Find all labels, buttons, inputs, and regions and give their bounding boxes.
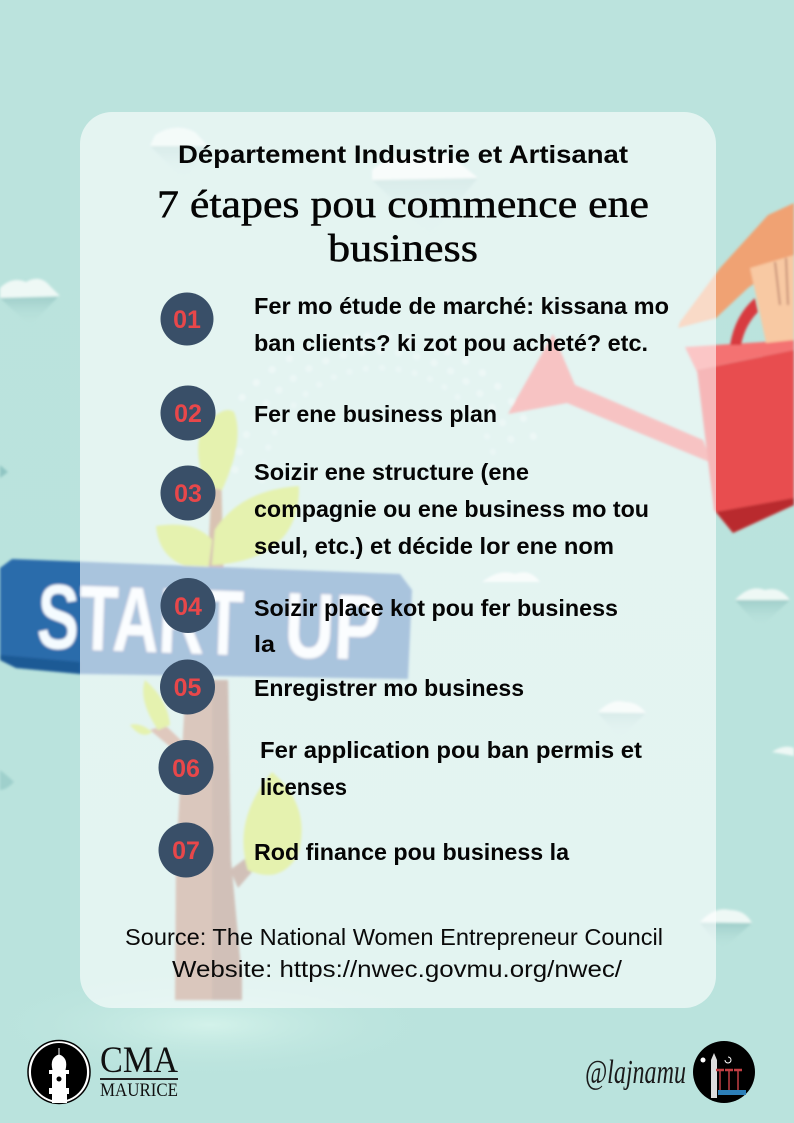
step 04: Soizir place kot pou fer business — [254, 595, 618, 621]
step 06: 06 — [172, 755, 200, 783]
hand — [678, 203, 794, 343]
step 03: Soizir ene structure (ene — [254, 459, 529, 485]
icon: minaret badge — [28, 1040, 90, 1104]
start up sign — [0, 559, 412, 680]
logo: CMA Maurice — [28, 1040, 178, 1104]
title: 7 étapes pou commence ene — [157, 183, 649, 226]
clouds — [0, 128, 794, 950]
step 02: Fer ene business plan — [254, 401, 497, 427]
step 04 — [160, 578, 618, 657]
step 04: 04 — [174, 593, 202, 621]
water dots — [205, 336, 535, 480]
step 05: 05 — [174, 674, 201, 702]
step 06 — [158, 737, 642, 800]
logo: CMA Maurice: CMA — [100, 1040, 178, 1081]
source text — [125, 924, 663, 982]
watering can — [508, 298, 794, 533]
tree — [130, 410, 302, 1000]
step 07 — [158, 822, 569, 878]
step 03: seul, etc.) et décide lor ene nom — [254, 533, 614, 559]
step 03 — [160, 459, 649, 559]
step 02: 02 — [174, 400, 202, 428]
logo: CMA Maurice: MAURICE — [100, 1080, 178, 1101]
step 06: licenses — [260, 774, 347, 800]
step 01 — [160, 292, 669, 356]
step 01: 01 — [173, 306, 201, 334]
logo: lajnamu handle — [585, 1041, 755, 1103]
logo: lajnamu handle: @lajnamu — [585, 1054, 686, 1091]
step 07: Rod finance pou business la — [254, 839, 569, 865]
start up sign: START — [35, 566, 245, 675]
step 03: compagnie ou ene business mo tou — [254, 496, 649, 522]
step 06: Fer application pou ban permis et — [260, 737, 642, 763]
title — [157, 183, 649, 270]
step 01: Fer mo étude de marché: kissana mo — [254, 293, 669, 319]
step 02 — [160, 386, 497, 440]
panel: content card — [80, 112, 716, 1008]
step 07: 07 — [172, 837, 200, 865]
step 03: 03 — [174, 480, 202, 508]
source text: Website: https://nwec.govmu.org/nwec/ — [172, 956, 623, 982]
icon: lajnamu badge — [693, 1041, 755, 1103]
step 04: la — [254, 631, 275, 657]
step 05 — [160, 660, 524, 714]
start up sign: UP — [283, 575, 382, 680]
step 01: ban clients? ki zot pou acheté? etc. — [254, 330, 648, 356]
title: business — [328, 227, 478, 270]
source text: Source: The National Women Entrepreneur Council — [125, 924, 663, 950]
heading: department: Département Industrie et Artisanat — [178, 141, 629, 169]
step 05: Enregistrer mo business — [254, 675, 524, 701]
